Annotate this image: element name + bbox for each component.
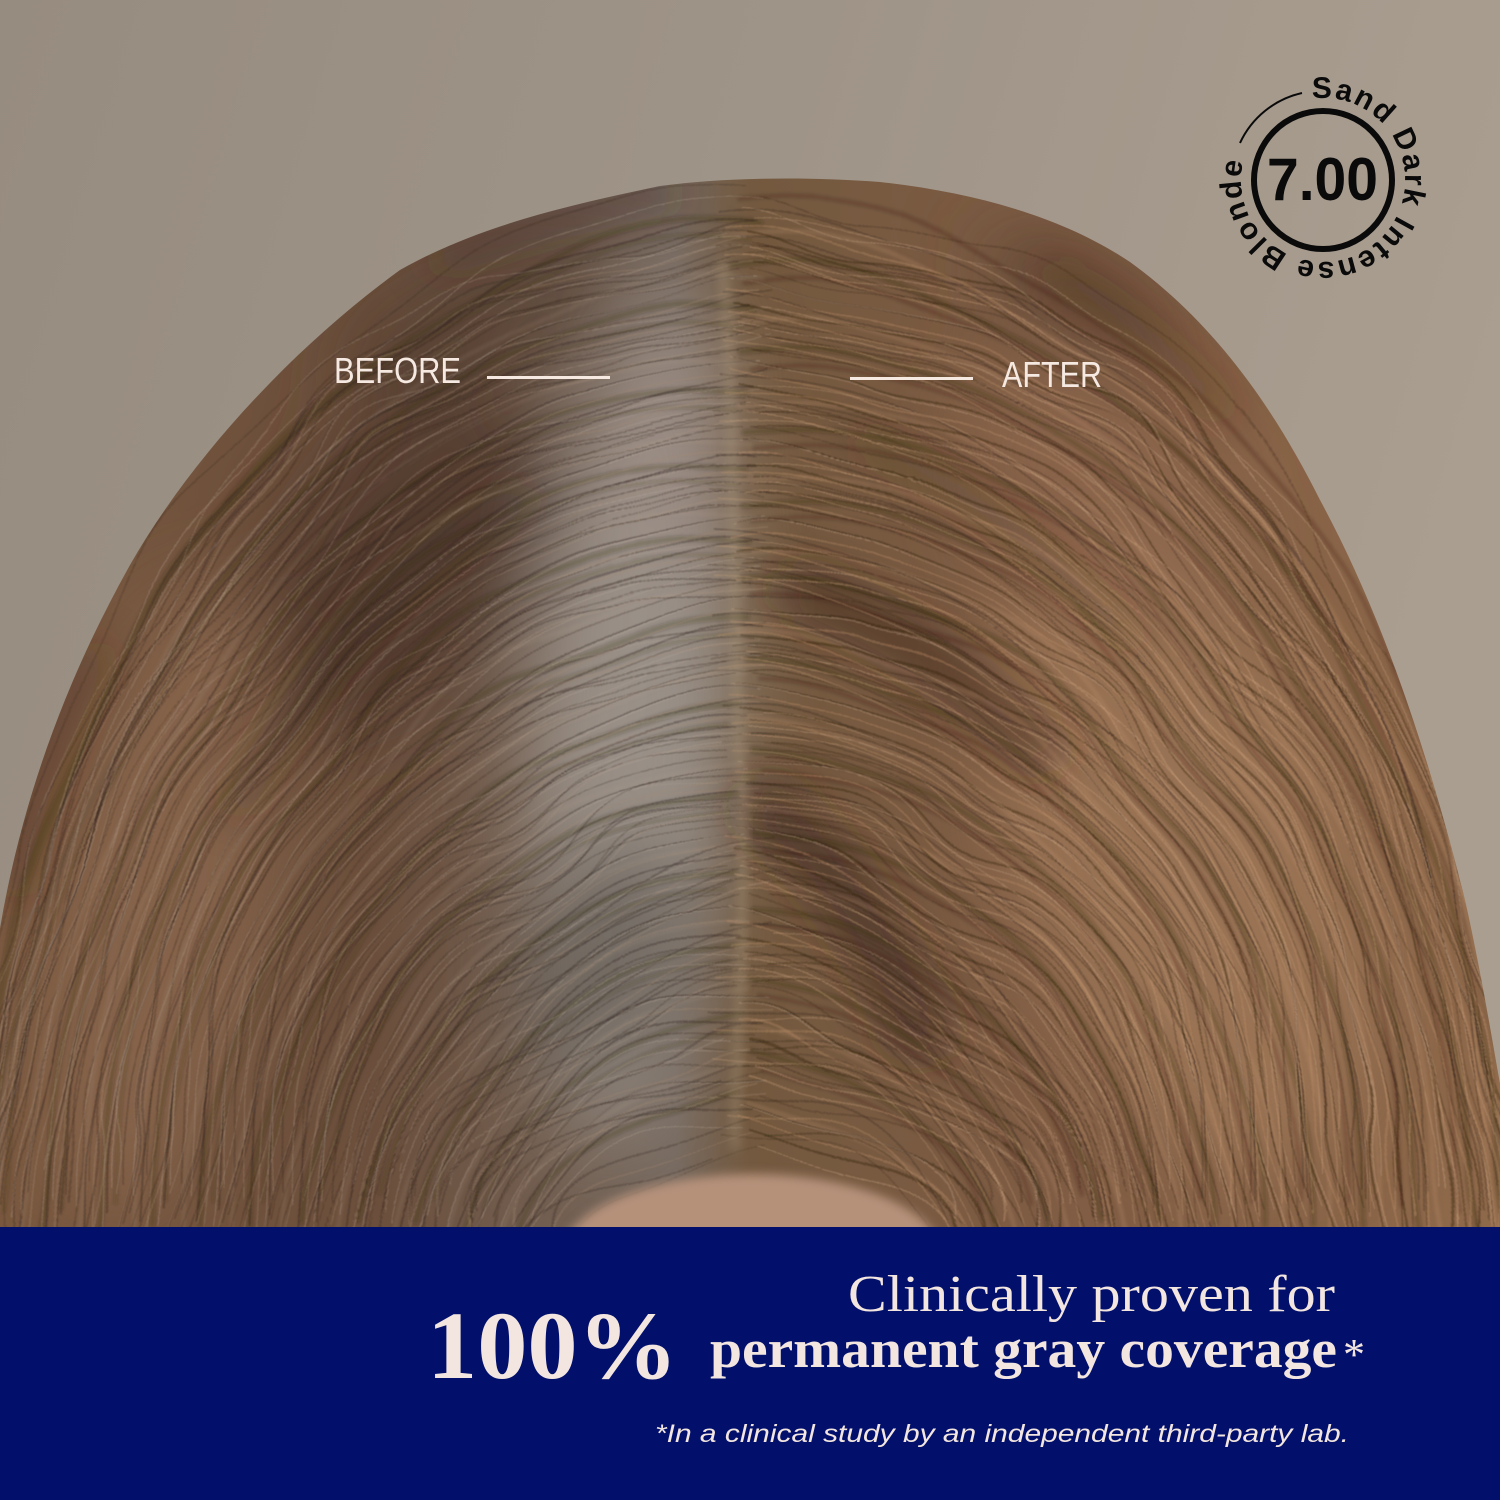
dark hair streaks xyxy=(10,190,1220,1030)
bottom banner xyxy=(0,1227,1500,1500)
right side strands (covered) xyxy=(721,190,1500,1262)
asterisk: * xyxy=(1343,1330,1365,1379)
after label with line xyxy=(850,354,1102,395)
big statistic: 100% xyxy=(427,1292,678,1399)
before label with line xyxy=(334,350,610,391)
heading line two: permanent gray coverage xyxy=(710,1319,1337,1379)
shade badge: 7.00 xyxy=(1267,146,1378,213)
forehead skin xyxy=(568,1168,936,1227)
shade badge: Sand Dark Intense Blonde xyxy=(1219,77,1426,278)
photo: hair before and after xyxy=(0,178,1500,1227)
hair part line xyxy=(722,260,743,1150)
before label with line: BEFORE xyxy=(334,350,461,391)
left side strands (gray roots) xyxy=(0,190,769,1262)
heading line one: Clinically proven for xyxy=(848,1266,1335,1323)
footnote: *In a clinical study by an independent third-party lab. xyxy=(655,1420,1349,1448)
after label with line: AFTER xyxy=(1002,354,1102,395)
